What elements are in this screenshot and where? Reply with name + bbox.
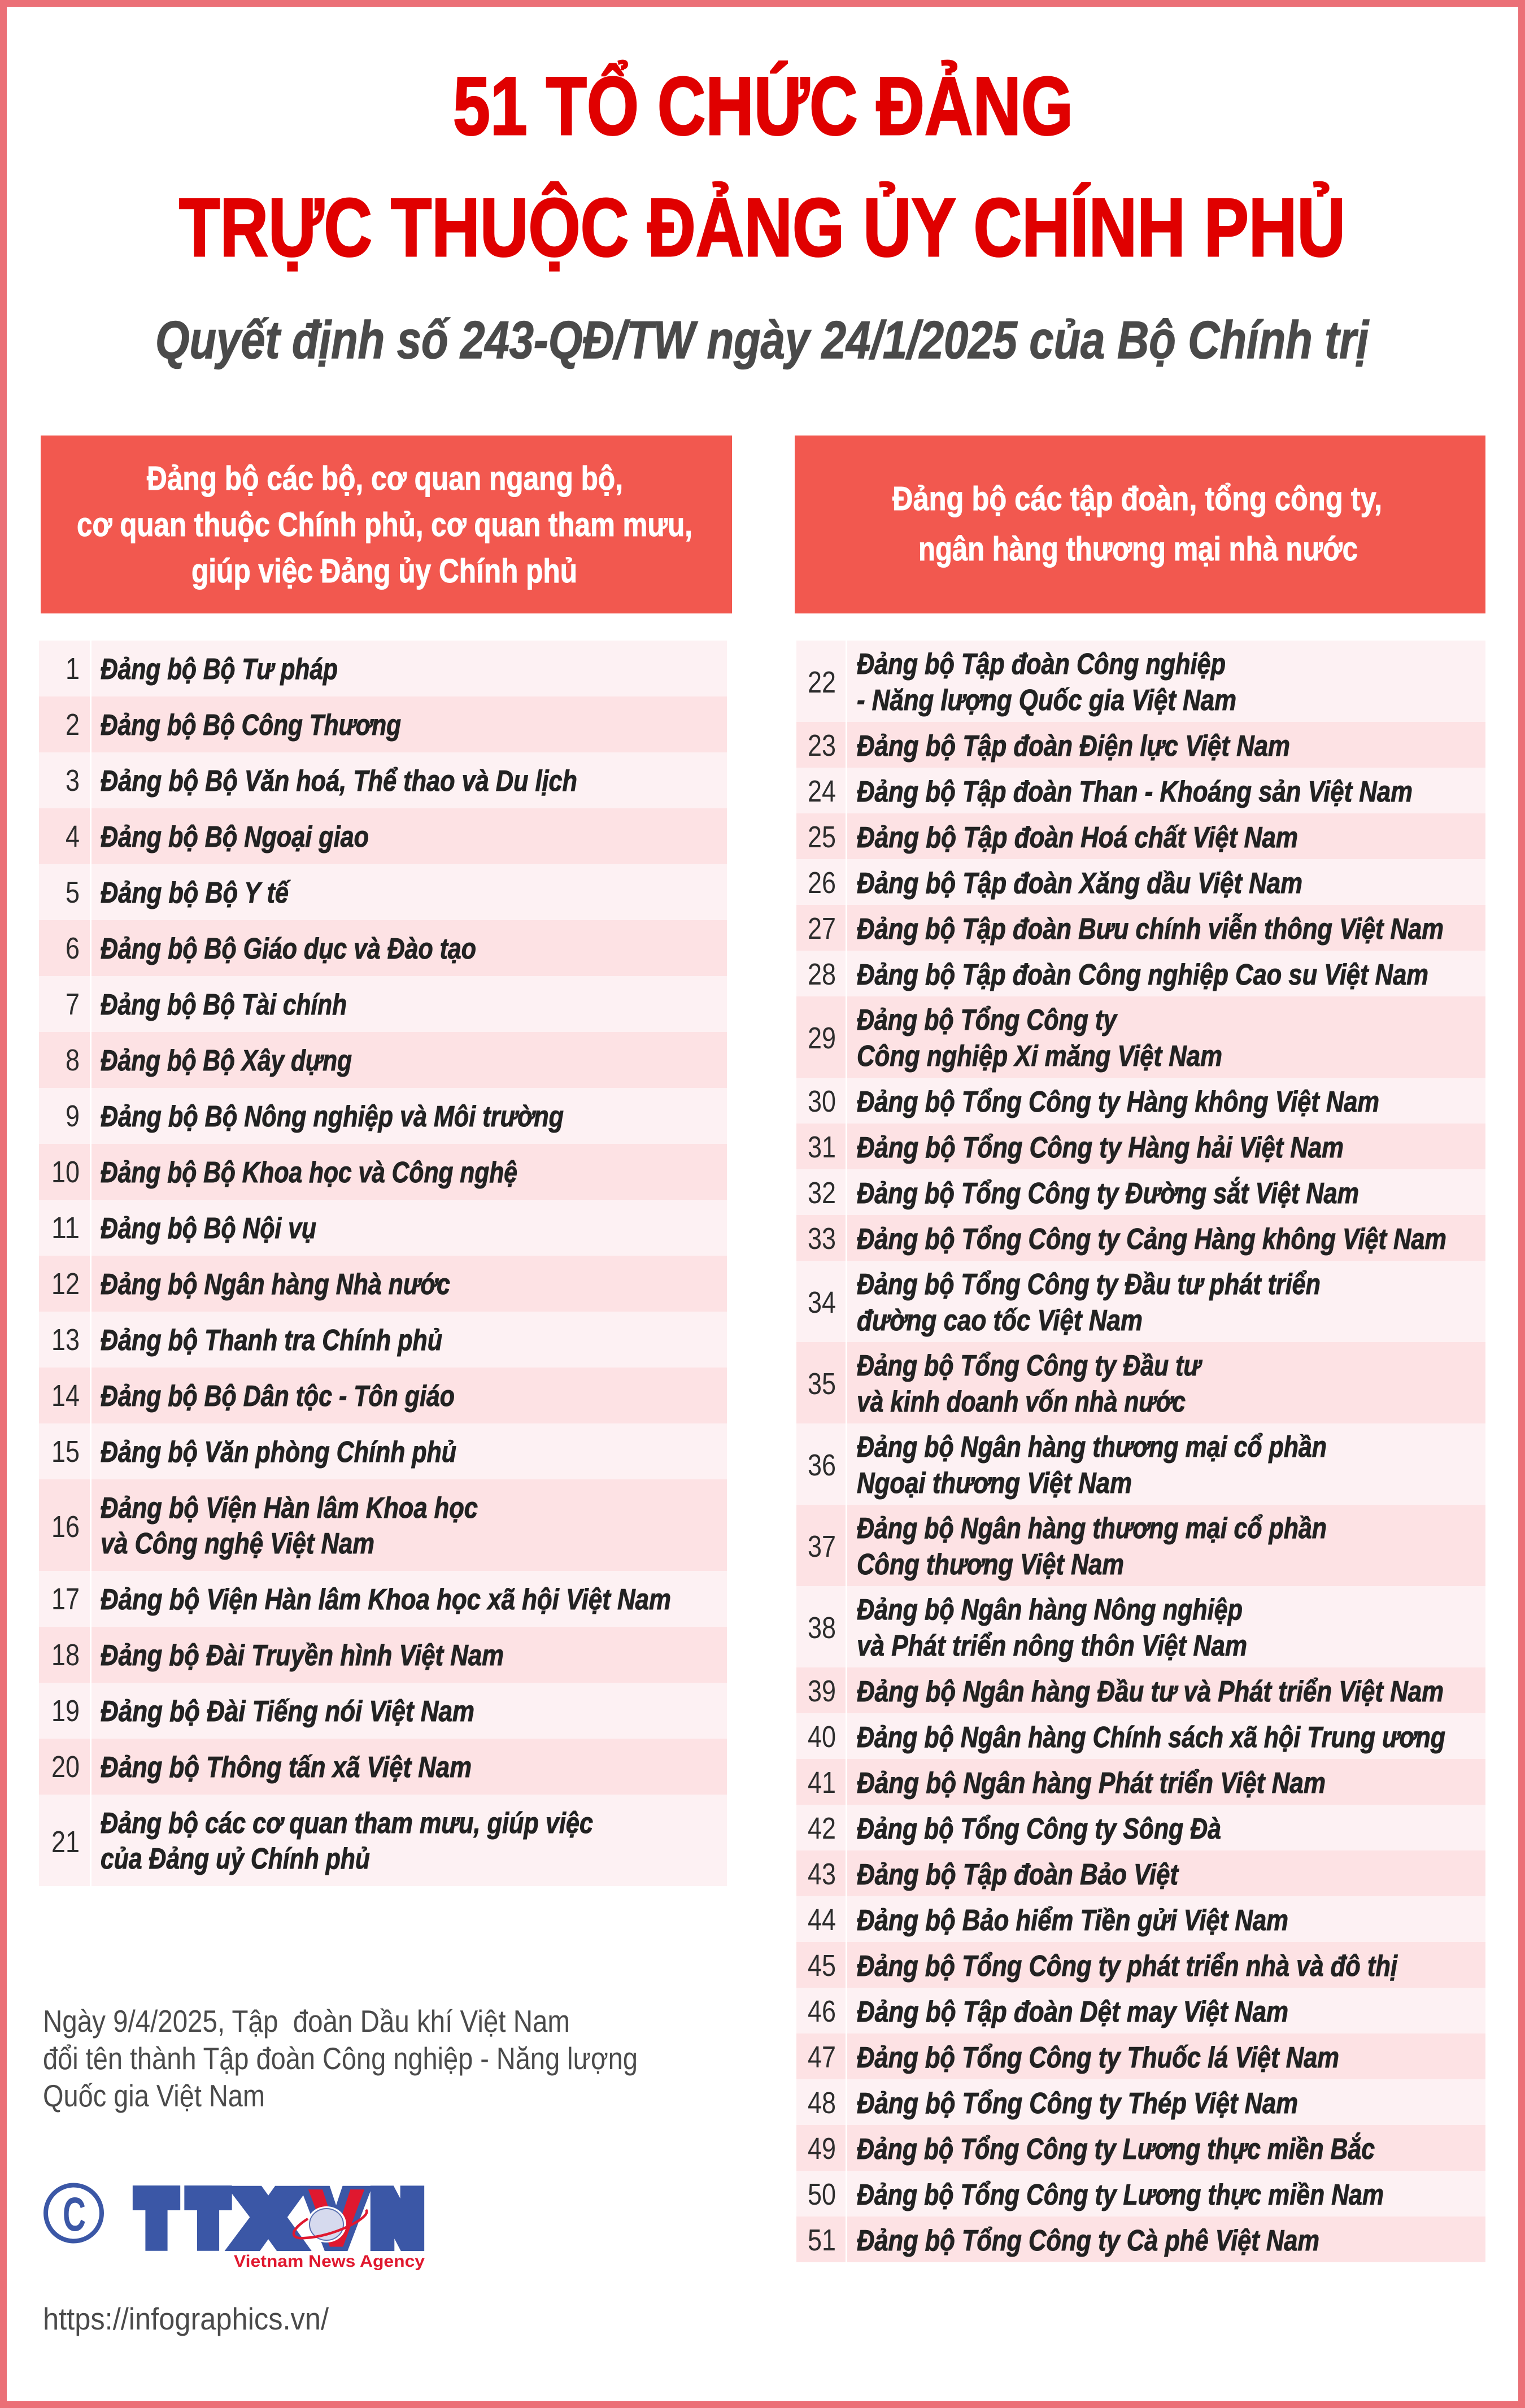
row 8: 8 [66,1043,80,1077]
row 10: Đảng bộ Bộ Khoa học và Công nghệ [101,1156,517,1189]
row 24 [796,768,1485,813]
row 40 [796,1713,1485,1759]
row 7: Đảng bộ Bộ Tài chính [101,989,347,1021]
row 10 [39,1144,727,1200]
row 31 [796,1124,1485,1169]
row 3: 3 [66,764,80,798]
panel: left column header: Đảng bộ các bộ, cơ quan ngang bộ, [147,460,623,497]
row 1: Đảng bộ Bộ Tư pháp [101,653,338,686]
row 14: 14 [51,1379,80,1413]
row 29: 29 [808,1021,836,1055]
logo: TTXVN Vietnam News Agency: V [309,2174,364,2263]
row 12: Đảng bộ Ngân hàng Nhà nước [101,1268,450,1301]
row 44 [796,1896,1485,1942]
panel: left column header [41,436,732,613]
row 29: Công nghiệp Xi măng Việt Nam [857,1040,1222,1073]
row 32 [796,1169,1485,1215]
row 5 [39,864,727,920]
logo: TTXVN Vietnam News Agency: Vietnam News Agency [234,2252,425,2271]
row 8 [39,1032,727,1088]
row 30: Đảng bộ Tổng Công ty Hàng không Việt Nam [857,1086,1379,1118]
logo: TTXVN Vietnam News Agency: N [374,2180,421,2258]
row 13: Đảng bộ Thanh tra Chính phủ [101,1324,442,1357]
panel: right list of party organisations 22-51 [796,641,1485,2262]
row 34: 34 [808,1286,836,1320]
row 46: 46 [808,1995,836,2028]
row 15 [39,1423,727,1479]
row 16 [39,1479,727,1571]
row 18: Đảng bộ Đài Truyền hình Việt Nam [101,1639,504,1672]
footnote text [43,2004,638,2113]
row 4 [39,808,727,864]
row 19: Đảng bộ Đài Tiếng nói Việt Nam [101,1695,474,1728]
row 48 [796,2079,1485,2125]
row 38: 38 [808,1611,836,1645]
row 44: 44 [808,1903,836,1937]
row 35 [796,1342,1485,1423]
panel: right column header [795,436,1485,613]
footnote text: Ngày 9/4/2025, Tập đoàn Dầu khí Việt Nam [43,2004,570,2039]
row 6: Đảng bộ Bộ Giáo dục và Đào tạo [101,933,476,965]
row 39 [796,1667,1485,1713]
row 29 [796,996,1485,1078]
row 9: Đảng bộ Bộ Nông nghiệp và Môi trường [101,1100,564,1133]
row 19: 19 [51,1694,80,1728]
row 9 [39,1088,727,1144]
row 35: 35 [808,1367,836,1401]
row 1: 1 [66,652,80,686]
row 13 [39,1312,727,1368]
row 10: 10 [51,1155,80,1189]
row 38: và Phát triển nông thôn Việt Nam [857,1630,1247,1662]
row 15: 15 [51,1435,80,1469]
row 31: 31 [808,1130,836,1164]
row 42: 42 [808,1812,836,1845]
row 47: Đảng bộ Tổng Công ty Thuốc lá Việt Nam [857,2041,1339,2074]
row 23: Đảng bộ Tập đoàn Điện lực Việt Nam [857,730,1290,763]
row 49: Đảng bộ Tổng Công ty Lương thực miền Bắc [857,2132,1375,2166]
row 21: của Đảng uỷ Chính phủ [101,1843,370,1875]
row 17: 17 [51,1582,80,1616]
row 20 [39,1739,727,1795]
row 43 [796,1850,1485,1896]
row 7 [39,976,727,1032]
row 25 [796,813,1485,859]
title: 51 TỔ CHỨC ĐẢNG [453,60,1073,152]
row 18: 18 [51,1638,80,1672]
row 15: Đảng bộ Văn phòng Chính phủ [101,1436,456,1469]
row 11 [39,1200,727,1256]
row 33 [796,1215,1485,1261]
row 26: 26 [808,866,836,900]
row 2: Đảng bộ Bộ Công Thương [101,709,401,742]
row 16: 16 [51,1510,80,1544]
row 22 [796,641,1485,722]
row 16: Đảng bộ Viện Hàn lâm Khoa học [101,1492,478,1525]
row 28: Đảng bộ Tập đoàn Công nghiệp Cao su Việt Nam [857,959,1428,991]
row 36 [796,1423,1485,1505]
row 1 [39,641,727,696]
panel: left column header: cơ quan thuộc Chính phủ, cơ quan tham mưu, [77,506,692,543]
row 4: 4 [66,820,80,854]
row 51 [796,2217,1485,2262]
row 49 [796,2125,1485,2171]
row 20: 20 [51,1750,80,1784]
footnote text: đổi tên thành Tập đoàn Công nghiệp - Năng lượng [43,2041,638,2076]
row 45 [796,1942,1485,1988]
logo: TTXVN Vietnam News Agency: T [139,2180,174,2258]
row 51: 51 [808,2223,836,2257]
row 4: Đảng bộ Bộ Ngoại giao [101,821,369,854]
row 34: Đảng bộ Tổng Công ty Đầu tư phát triển [857,1268,1321,1301]
row 50: Đảng bộ Tổng Công ty Lương thực miền Nam [857,2179,1384,2211]
row 40: 40 [808,1720,836,1754]
row 19 [39,1683,727,1739]
row 20: Đảng bộ Thông tấn xã Việt Nam [101,1751,472,1784]
row 6 [39,920,727,976]
panel: left list of party organisations 1-21 [39,641,727,1886]
row 37: Đảng bộ Ngân hàng thương mại cổ phần [857,1512,1327,1545]
row 43: Đảng bộ Tập đoàn Bảo Việt [857,1858,1179,1891]
row 24: Đảng bộ Tập đoàn Than - Khoáng sản Việt Nam [857,776,1413,808]
row 22: Đảng bộ Tập đoàn Công nghiệp [857,648,1226,681]
row 34 [796,1261,1485,1342]
row 14: Đảng bộ Bộ Dân tộc - Tôn giáo [101,1380,455,1413]
footnote text: Quốc gia Việt Nam [43,2078,265,2113]
row 2: 2 [66,708,80,742]
logo: TTXVN Vietnam News Agency: T [191,2180,226,2258]
row 41: 41 [808,1766,836,1800]
row 12 [39,1256,727,1312]
row 28 [796,951,1485,996]
row 23 [796,722,1485,768]
row 31: Đảng bộ Tổng Công ty Hàng hải Việt Nam [857,1131,1344,1164]
row 13: 13 [51,1323,80,1357]
panel: right column header: Đảng bộ các tập đoàn, tổng công ty, [892,480,1382,517]
row 18 [39,1627,727,1683]
row 21: 21 [51,1825,80,1859]
row 7: 7 [66,987,80,1021]
row 35: và kinh doanh vốn nhà nước [857,1386,1186,1418]
row 11: Đảng bộ Bộ Nội vụ [101,1212,316,1245]
row 45: Đảng bộ Tổng Công ty phát triển nhà và đô thị [857,1950,1398,1983]
row 11: 11 [51,1211,80,1245]
row 42: Đảng bộ Tổng Công ty Sông Đà [857,1813,1221,1845]
row 33: 33 [808,1222,836,1256]
row 35: Đảng bộ Tổng Công ty Đầu tư [857,1349,1202,1382]
row 22: 22 [808,665,836,699]
row 51: Đảng bộ Tổng Công ty Cà phê Việt Nam [857,2224,1319,2257]
row 37: 37 [808,1530,836,1564]
row 27: 27 [808,912,836,946]
row 41: Đảng bộ Ngân hàng Phát triển Việt Nam [857,1767,1326,1800]
row 14 [39,1368,727,1423]
row 12: 12 [51,1267,80,1301]
row 42 [796,1805,1485,1850]
row 32: 32 [808,1176,836,1210]
row 3: Đảng bộ Bộ Văn hoá, Thể thao và Du lịch [101,765,577,798]
row 21: Đảng bộ các cơ quan tham mưu, giúp việc [101,1807,593,1840]
row 47: 47 [808,2040,836,2074]
row 17 [39,1571,727,1627]
logo: TTXVN Vietnam News Agency: X [242,2180,295,2258]
row 6: 6 [66,931,80,965]
logo: TTXVN Vietnam News Agency [139,2174,425,2271]
row 46 [796,1988,1485,2033]
row 23: 23 [808,729,836,763]
icon: copyright mark: C [63,2188,86,2241]
row 17: Đảng bộ Viện Hàn lâm Khoa học xã hội Việt Nam [101,1583,671,1616]
row 43: 43 [808,1857,836,1891]
panel: left column header: giúp việc Đảng ủy Chính phủ [191,552,577,590]
row 39: 39 [808,1674,836,1708]
row 3 [39,752,727,808]
row 46: Đảng bộ Tập đoàn Dệt may Việt Nam [857,1996,1288,2028]
row 26: Đảng bộ Tập đoàn Xăng dầu Việt Nam [857,867,1302,900]
row 38: Đảng bộ Ngân hàng Nông nghiệp [857,1593,1243,1626]
row 37 [796,1505,1485,1586]
source url: https://infographics.vn/ [43,2301,329,2336]
row 30: 30 [808,1085,836,1118]
row 16: và Công nghệ Việt Nam [101,1527,374,1560]
row 38 [796,1586,1485,1667]
row 34: đường cao tốc Việt Nam [857,1304,1143,1337]
row 48: Đảng bộ Tổng Công ty Thép Việt Nam [857,2087,1298,2120]
row 36: 36 [808,1448,836,1482]
row 32: Đảng bộ Tổng Công ty Đường sắt Việt Nam [857,1177,1359,1210]
row 5: 5 [66,876,80,909]
row 49: 49 [808,2132,836,2166]
row 37: Công thương Việt Nam [857,1548,1124,1581]
row 25: 25 [808,820,836,854]
row 50 [796,2171,1485,2217]
row 44: Đảng bộ Bảo hiểm Tiền gửi Việt Nam [857,1904,1288,1937]
row 26 [796,859,1485,905]
row 2 [39,696,727,752]
row 9: 9 [66,1099,80,1133]
panel: right column header: ngân hàng thương mại nhà nước [918,530,1358,568]
row 47 [796,2033,1485,2079]
logo: TTXVN Vietnam News Agency: V [312,2180,360,2258]
row 28: 28 [808,957,836,991]
row 8: Đảng bộ Bộ Xây dựng [101,1044,352,1077]
row 21 [39,1795,727,1886]
icon: copyright mark [46,2185,102,2241]
row 30 [796,1078,1485,1124]
row 22: - Năng lượng Quốc gia Việt Nam [857,684,1236,717]
row 25: Đảng bộ Tập đoàn Hoá chất Việt Nam [857,821,1298,854]
row 36: Ngoại thương Việt Nam [857,1467,1132,1500]
row 27 [796,905,1485,951]
row 5: Đảng bộ Bộ Y tế [101,877,291,909]
row 45: 45 [808,1949,836,1983]
row 36: Đảng bộ Ngân hàng thương mại cổ phần [857,1431,1327,1464]
row 29: Đảng bộ Tổng Công ty [857,1004,1118,1037]
title [179,60,1345,273]
row 41 [796,1759,1485,1805]
row 48: 48 [808,2086,836,2120]
row 50: 50 [808,2178,836,2211]
row 24: 24 [808,774,836,808]
